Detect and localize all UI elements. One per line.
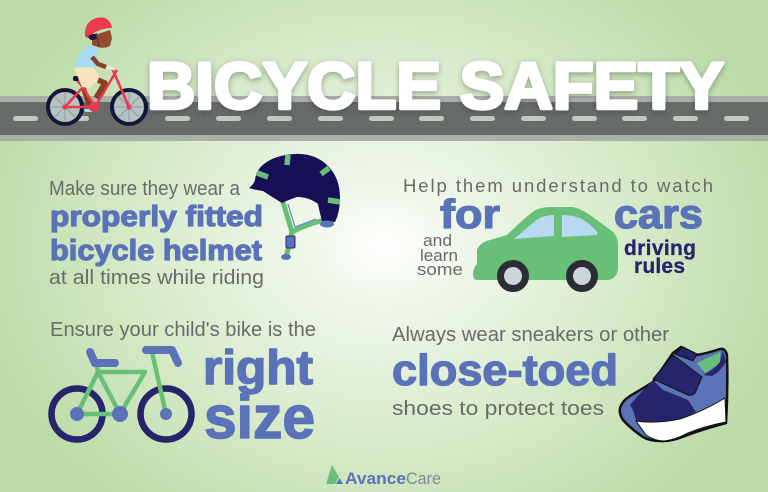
cars tip text: Help them understand to watch: [403, 175, 713, 196]
panel: helmet tip: [49, 154, 340, 289]
logo: [326, 465, 441, 488]
icon: sneaker: [620, 347, 727, 441]
shoes tip text: shoes to protect toes: [392, 398, 604, 420]
bike size tip text: [50, 319, 316, 451]
helmet tip text: bicycle helmet: [50, 235, 262, 267]
helmet tip text: Make sure they wear a: [49, 178, 241, 200]
cars tip text: driving: [624, 237, 696, 260]
icon: car: [473, 207, 618, 288]
cars tip text: [403, 175, 713, 279]
cars tip text: rules: [634, 255, 685, 278]
icon: child riding a red bicycle: [48, 17, 146, 124]
panel: shoes tip: [392, 324, 727, 441]
panel: cars tip: [403, 175, 713, 288]
bike size tip text: right: [203, 342, 313, 395]
shoes tip text: Always wear sneakers or other: [392, 324, 669, 346]
title: BICYCLE SAFETY: [147, 48, 724, 122]
cars tip text: learn: [420, 247, 458, 265]
bike size tip text: size: [204, 384, 315, 451]
icon: bicycle: [52, 350, 192, 440]
bike size tip text: Ensure your child's bike is the: [50, 319, 316, 341]
shoes tip text: close-toed: [392, 346, 618, 395]
logo: Care: [406, 469, 441, 488]
icon: helmet: [249, 154, 340, 260]
cars tip text: and: [423, 232, 452, 250]
panel: bike size tip: [50, 319, 316, 451]
cars tip text: for: [440, 191, 500, 237]
helmet tip text: [49, 178, 264, 289]
shoes tip text: [392, 324, 669, 420]
helmet tip text: properly fitted: [50, 201, 263, 233]
road: [0, 96, 768, 141]
cars tip text: some: [417, 261, 463, 279]
cars tip text: cars: [614, 191, 703, 237]
logo: Avance: [345, 469, 406, 488]
helmet tip text: at all times while riding: [49, 267, 264, 289]
